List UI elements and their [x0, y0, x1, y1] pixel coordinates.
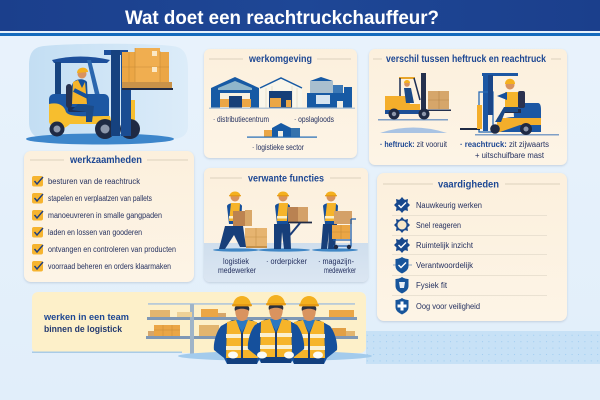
worker: orderpicker	[274, 192, 312, 249]
skill: Oog voor veiligheid: Oog voor veiligheid	[416, 302, 480, 311]
panel: werkomgeving	[204, 49, 357, 158]
pallet load	[122, 52, 169, 82]
icon: logistieke sector	[247, 123, 317, 138]
text: team: werken in een team	[43, 312, 129, 322]
illustration: three workers	[214, 295, 337, 364]
skill: Snel reageren: Snel reageren	[416, 221, 461, 230]
driver	[72, 68, 94, 122]
skill: Snel reageren	[394, 217, 461, 233]
panel: werkomgeving: · distributiecentrum	[213, 115, 269, 124]
task list: besturen van de reachtruck	[48, 177, 141, 186]
panel: werken in een team: binnen de logistick	[44, 324, 123, 334]
panel: verwante functies: medewerker	[324, 266, 356, 275]
panel: verschil tussen heftruck en reachtruck: · reachtruck: zit zijwaarts	[460, 140, 549, 149]
worker: magazijnmedewerker	[321, 192, 356, 249]
skill: Verantwoordelijk: Verantwoordelijk	[416, 261, 474, 270]
heading: werkomgeving	[248, 54, 312, 65]
icon: opslagloods	[260, 78, 302, 108]
heading: werkzaamheden	[69, 155, 142, 166]
panel: verschil tussen heftruck en reachtruck	[369, 49, 567, 165]
panel: verwante functies: logistiek	[223, 257, 250, 266]
panel: verwante functies: · magazijn-	[318, 257, 354, 266]
worker: logistiek medewerker	[219, 192, 267, 249]
skill: Oog voor veiligheid	[396, 298, 480, 314]
skill: Ruimtelijk inzicht: Ruimtelijk inzicht	[416, 241, 474, 250]
panel: verschil tussen heftruck en reachtruck: · heftruck: zit vooruit	[380, 140, 448, 149]
task list: voorraad beheren en orders klaarmaken	[48, 262, 171, 271]
band: dotted decoration	[366, 331, 600, 364]
illustration: reachtruck	[460, 73, 559, 136]
skill: Ruimtelijk inzicht	[394, 237, 474, 253]
heading: vaardigheden	[438, 180, 499, 190]
illustration: forklift with driver	[26, 44, 188, 144]
task list: stapelen en verplaatzen van pallets	[48, 194, 152, 203]
panel: verwante functies	[204, 168, 368, 282]
skill: Fysiek fit: Fysiek fit	[416, 281, 448, 290]
panel: verwante functies: · orderpicker	[266, 257, 307, 266]
task list: ontvangen en controleren van producten	[48, 245, 176, 254]
task list: laden en lossen van gooderen	[48, 228, 142, 237]
task list: manoeuvreren in smalle gangpaden	[48, 211, 162, 220]
skill: Nauwkeurig werken: Nauwkeurig werken	[416, 201, 482, 210]
panel: verschil tussen heftruck en reachtruck: + uitschuifbare mast	[475, 151, 545, 160]
heading: verschil tussen heftruck en reachtruck	[386, 54, 546, 65]
mast	[104, 50, 128, 55]
skill: Verantwoordelijk	[393, 257, 474, 274]
panel: verwante functies: medewerker	[218, 266, 256, 275]
panel: werken in een team	[32, 292, 372, 364]
icon: distributiecentrum	[211, 77, 259, 108]
skill: Fysiek fit	[396, 277, 448, 294]
panel: werkomgeving: · opslagloods	[294, 115, 334, 124]
title banner	[0, 0, 600, 36]
illustration: warehouse shelves	[146, 303, 358, 354]
heading: verwante functies	[248, 174, 324, 184]
panel: vaardigheden	[377, 173, 567, 321]
title: Wat doet een reachtruckchauffeur?	[125, 7, 439, 29]
panel: werkzaamheden	[24, 151, 194, 282]
illustration: heftruck	[378, 73, 451, 133]
skill: Nauwkeurig werken	[394, 197, 482, 213]
task list	[32, 176, 176, 272]
icon: fabriek	[307, 77, 352, 108]
wheels	[50, 122, 64, 136]
panel: werkomgeving: · logistieke sector	[252, 143, 304, 152]
